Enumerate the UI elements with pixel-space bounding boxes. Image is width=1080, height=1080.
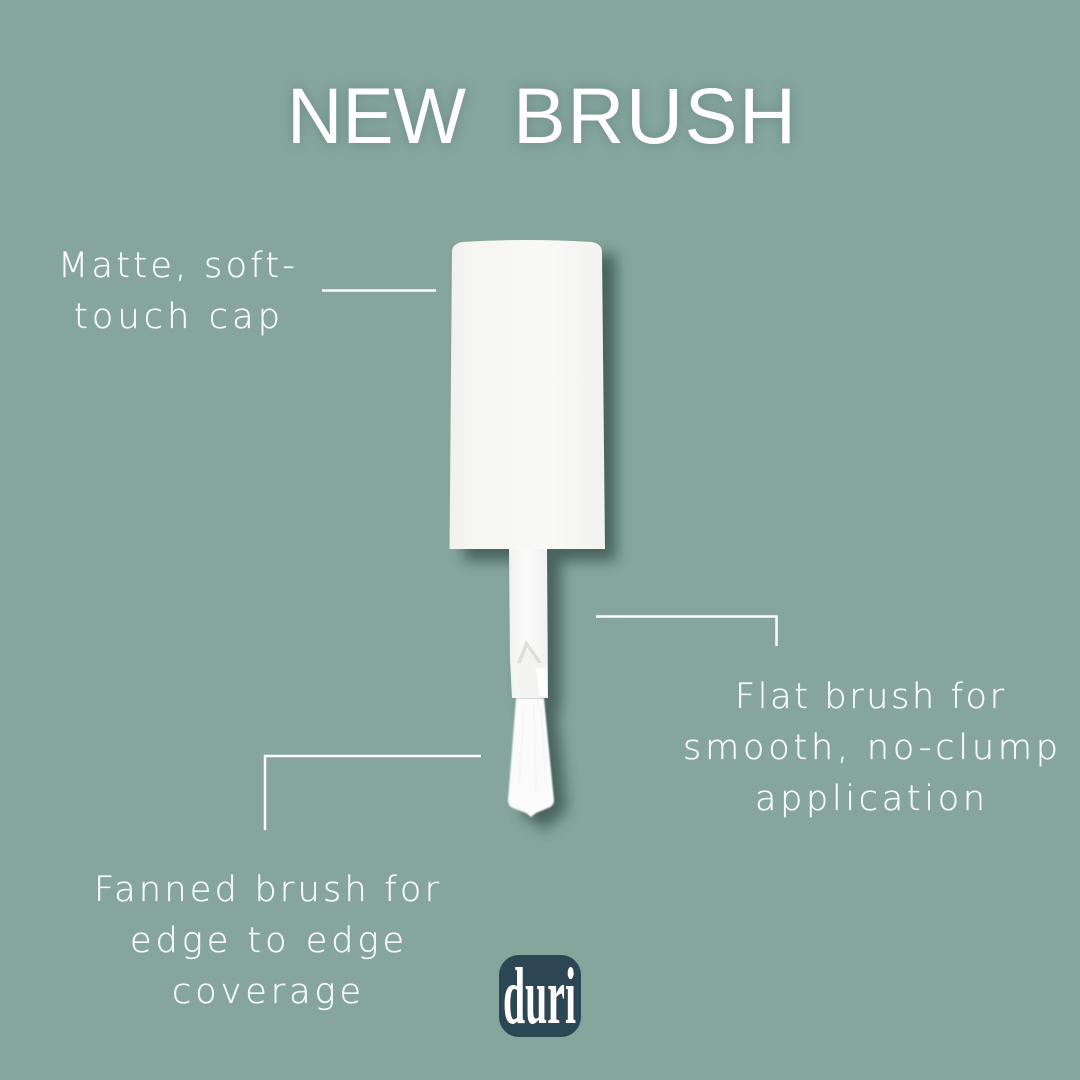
callout: fanned brush bbox=[94, 870, 440, 1012]
title: NEW bbox=[287, 71, 466, 160]
callout: cap: Matte, soft- bbox=[58, 246, 295, 286]
product: brush and cap bbox=[450, 240, 616, 830]
leader line: cap bbox=[322, 289, 436, 292]
icon: cap bbox=[450, 240, 605, 549]
title bbox=[287, 71, 796, 160]
icon: shaft bbox=[509, 549, 548, 698]
callout: fanned brush: edge to edge bbox=[130, 921, 404, 961]
callout: flat brush: application bbox=[755, 779, 985, 819]
leader line: flat brush bbox=[596, 616, 776, 646]
callout: flat brush bbox=[683, 677, 1058, 819]
logo: duri: duri bbox=[503, 953, 576, 1041]
title: BRUSH bbox=[513, 71, 796, 160]
callout: flat brush: Flat brush for bbox=[735, 677, 1005, 717]
callout: fanned brush: coverage bbox=[172, 972, 361, 1012]
logo: duri bbox=[499, 953, 581, 1041]
title: BRUSH bbox=[513, 71, 796, 160]
product shadow bbox=[464, 254, 616, 830]
callout: cap: touch cap bbox=[74, 297, 280, 337]
callout: flat brush: smooth, no-clump bbox=[683, 728, 1058, 768]
icon: bristles bbox=[508, 698, 554, 817]
icon: shaft arrow detail bbox=[517, 640, 547, 698]
title: NEW bbox=[287, 71, 466, 160]
leader line: fanned brush bbox=[265, 756, 481, 830]
callout: fanned brush: Fanned brush for bbox=[94, 870, 440, 910]
callout: cap bbox=[58, 246, 295, 337]
